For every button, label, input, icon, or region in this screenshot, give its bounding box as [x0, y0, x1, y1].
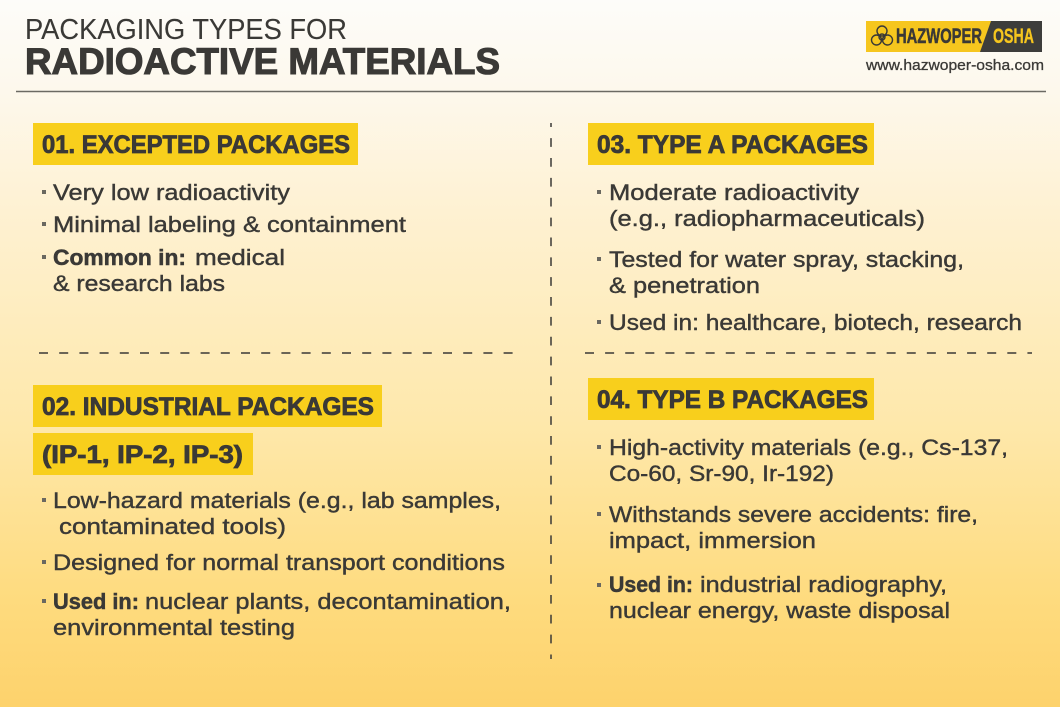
- list 04: High-activity materials (e.g., Cs-137,: [609, 435, 1008, 460]
- list 04: nuclear energy, waste disposal: [609, 598, 950, 623]
- list 03: Tested for water spray, stacking,: [609, 247, 964, 272]
- panel: 03 type A packages: [588, 123, 1022, 335]
- heading 02: [33, 385, 382, 475]
- list 02: nuclear plants, decontamination,: [145, 589, 511, 614]
- list 01: medical: [195, 245, 285, 270]
- list 02: [42, 488, 511, 640]
- list 04: [597, 435, 1008, 623]
- title: RADIOACTIVE MATERIALS: [25, 41, 500, 82]
- title: [25, 14, 500, 82]
- list 01: & research labs: [53, 271, 225, 296]
- heading 03: [588, 123, 874, 165]
- logo: [865, 21, 1044, 74]
- vertical divider: [550, 123, 552, 659]
- heading 02: (IP-1, IP-2, IP-3): [42, 441, 243, 469]
- heading 04: 04. TYPE B PACKAGES: [597, 386, 868, 414]
- divider left: [39, 352, 514, 354]
- heading 01: [33, 123, 358, 165]
- list 03: Used in: healthcare, biotech, research: [609, 310, 1022, 335]
- panel: 02 industrial packages: [33, 385, 511, 640]
- list 02: Low-hazard materials (e.g., lab samples,: [53, 488, 501, 513]
- list 03: (e.g., radiopharmaceuticals): [609, 206, 925, 231]
- list 04: Withstands severe accidents: fire,: [609, 502, 978, 527]
- heading 02: 02. INDUSTRIAL PACKAGES: [42, 393, 374, 421]
- heading 04: [588, 378, 874, 420]
- logo: HAZWOPER: [896, 25, 982, 48]
- list 02: Used in:: [53, 589, 139, 614]
- heading 03: 03. TYPE A PACKAGES: [597, 131, 868, 159]
- list 02: contaminated tools): [59, 514, 286, 539]
- panel: 01 excepted packages: [33, 123, 406, 296]
- divider right: [585, 352, 1032, 354]
- header rule: [16, 90, 1046, 92]
- list 01: Very low radioactivity: [53, 180, 290, 205]
- list 03: Moderate radioactivity: [609, 180, 859, 205]
- list 03: [597, 180, 1022, 335]
- list 03: & penetration: [609, 273, 760, 298]
- logo: OSHA: [993, 25, 1034, 48]
- list 04: industrial radiography,: [700, 572, 947, 597]
- title: PACKAGING TYPES FOR: [25, 14, 347, 46]
- list 01: [42, 180, 406, 296]
- list 01: Common in:: [53, 245, 186, 270]
- icon: biohazard: [872, 26, 892, 45]
- list 04: Used in:: [609, 572, 693, 597]
- panel: 04 type B packages: [588, 378, 1008, 623]
- list 02: Designed for normal transport conditions: [53, 550, 505, 575]
- list 02: environmental testing: [53, 615, 295, 640]
- list 01: Minimal labeling & containment: [53, 212, 406, 237]
- list 04: Co-60, Sr-90, Ir-192): [609, 461, 834, 486]
- heading 01: 01. EXCEPTED PACKAGES: [42, 131, 350, 159]
- list 04: impact, immersion: [609, 528, 816, 553]
- logo: www.hazwoper-osha.com: [865, 57, 1044, 74]
